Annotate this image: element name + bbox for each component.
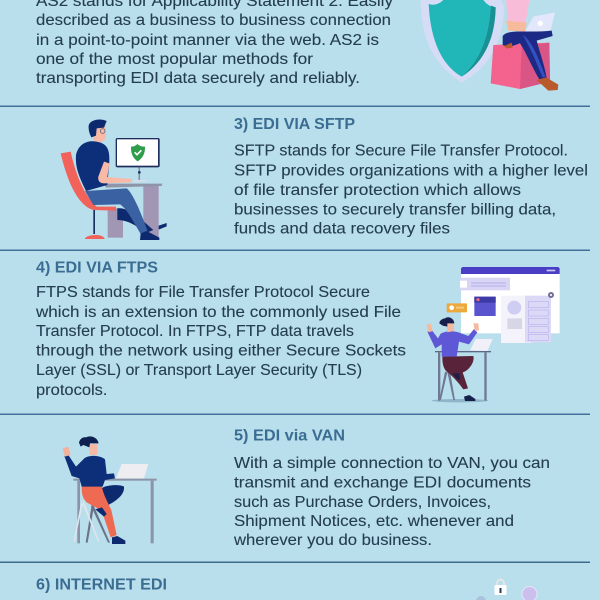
illustration: man at desk with secure monitor [61, 119, 167, 240]
text block: VAN description: With a simple connection to VAN, you can [234, 455, 550, 472]
pink seat box [491, 43, 550, 89]
text block: SFTP description: of file transfer protection which allows [234, 182, 521, 199]
monitor with shield [116, 138, 160, 182]
desk and chair [73, 464, 157, 543]
text block: SFTP description: funds and data recovery files [234, 220, 450, 238]
text block: VAN description: transmit and exchange EDI documents [234, 474, 531, 492]
icon: partial circle [476, 596, 486, 600]
text block: FTPS description: Transfer Protocol. In FTPS, FTP data travels [36, 323, 354, 340]
heading: EDI via SFTP: 3) EDI VIA SFTP [234, 116, 355, 133]
orange tag [447, 303, 467, 312]
seated man [76, 119, 167, 240]
shield [421, 0, 504, 83]
text block: VAN description: Shipment Notices, etc. whenever and [234, 513, 514, 530]
text block: FTPS description: protocols. [36, 382, 108, 399]
desk [104, 184, 162, 238]
text block: AS2 description [36, 0, 393, 87]
illustration: woman working on laptop at desk [63, 436, 157, 544]
seated person [503, 0, 558, 91]
text block: SFTP description [234, 142, 588, 238]
text block: AS2 description: transporting EDI data securely and reliably. [36, 70, 360, 87]
browser window [460, 267, 560, 343]
text block: AS2 description: one of the most popular methods for [36, 51, 313, 68]
desk and laptop [432, 339, 493, 402]
text block: FTPS description: through the network using either Secure Sockets [36, 342, 406, 360]
text block: FTPS description: FTPS stands for File Transfer Protocol Secure [36, 284, 370, 301]
text block: FTPS description [35, 284, 406, 399]
text block: AS2 description: described as a business to business connection [36, 12, 391, 29]
text block: SFTP description: SFTP stands for Secure File Transfer Protocol. [234, 142, 568, 160]
illustration: lock and fingerprint icons [476, 580, 537, 600]
text block: AS2 description: in a point-to-point manner via the web. AS2 is [36, 32, 379, 49]
text block: VAN description [233, 455, 550, 549]
text block: VAN description: such as Purchase Orders, Invoices, [234, 494, 491, 511]
illustration: woman with web page layout [427, 267, 560, 402]
icon: padlock [494, 580, 506, 595]
heading: Internet EDI: 6) INTERNET EDI [36, 576, 167, 594]
text block: SFTP description: businesses to securely transfer billing data, [234, 202, 556, 218]
heading: EDI via VAN: 5) EDI via VAN [234, 428, 345, 444]
icon: fingerprint [522, 586, 537, 600]
text block: FTPS description: which is an extension to the commonly used File [35, 304, 401, 321]
text block: VAN description: wherever you do business. [233, 532, 432, 549]
illustration: shield and person with laptop [421, 0, 558, 91]
red chair [61, 152, 116, 239]
seated woman [427, 317, 479, 401]
text block: SFTP description: SFTP provides organizations with a higher level [234, 162, 588, 180]
seated woman [63, 436, 125, 544]
text block: FTPS description: Layer (SSL) or Transport Layer Security (TLS) [36, 362, 362, 379]
heading: EDI via FTPS: 4) EDI VIA FTPS [36, 260, 158, 276]
